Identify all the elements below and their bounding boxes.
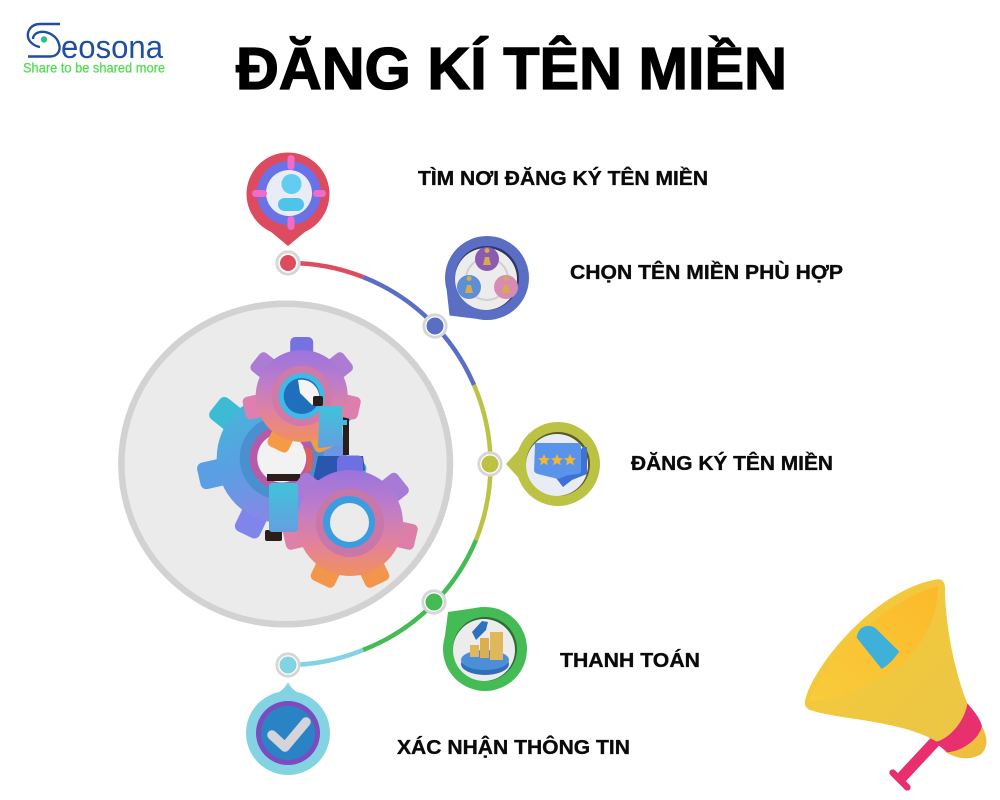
- icon: small tab on gears: [269, 483, 298, 532]
- icon: top pink gear: [242, 337, 362, 454]
- logo: Seosona: Share to be shared more: [23, 60, 165, 76]
- icon: olive rating pin: [506, 422, 600, 506]
- label 5: XÁC NHẬN THÔNG TIN: [397, 735, 630, 759]
- timeline nodes: [277, 252, 501, 676]
- icon: megaphone: [805, 579, 986, 787]
- label 3: ĐĂNG KÝ TÊN MIỀN: [631, 451, 833, 475]
- icon: blue people bubble: [445, 236, 529, 320]
- label 1: TÌM NƠI ĐĂNG KÝ TÊN MIỀN: [418, 166, 708, 190]
- title: ĐĂNG KÍ TÊN MIỀN: [236, 35, 787, 102]
- icon: red target pin: [246, 152, 330, 246]
- icon: left blue gear: [196, 373, 368, 541]
- label 4: THANH TOÁN: [560, 649, 700, 672]
- icon: green chart bubble: [443, 607, 527, 691]
- icon: small tab on top gear: [318, 406, 343, 448]
- dark frame behind gears: [267, 415, 365, 481]
- timeline arc: [288, 263, 491, 665]
- icon: right pink gear: [281, 456, 419, 589]
- central circle panel with gears: [121, 304, 450, 624]
- logo: Seosona: eosona: [61, 29, 163, 65]
- label 2: CHỌN TÊN MIỀN PHÙ HỢP: [570, 260, 843, 284]
- logo: Seosona: [23, 24, 165, 76]
- icon: cyan check pin: [246, 682, 330, 775]
